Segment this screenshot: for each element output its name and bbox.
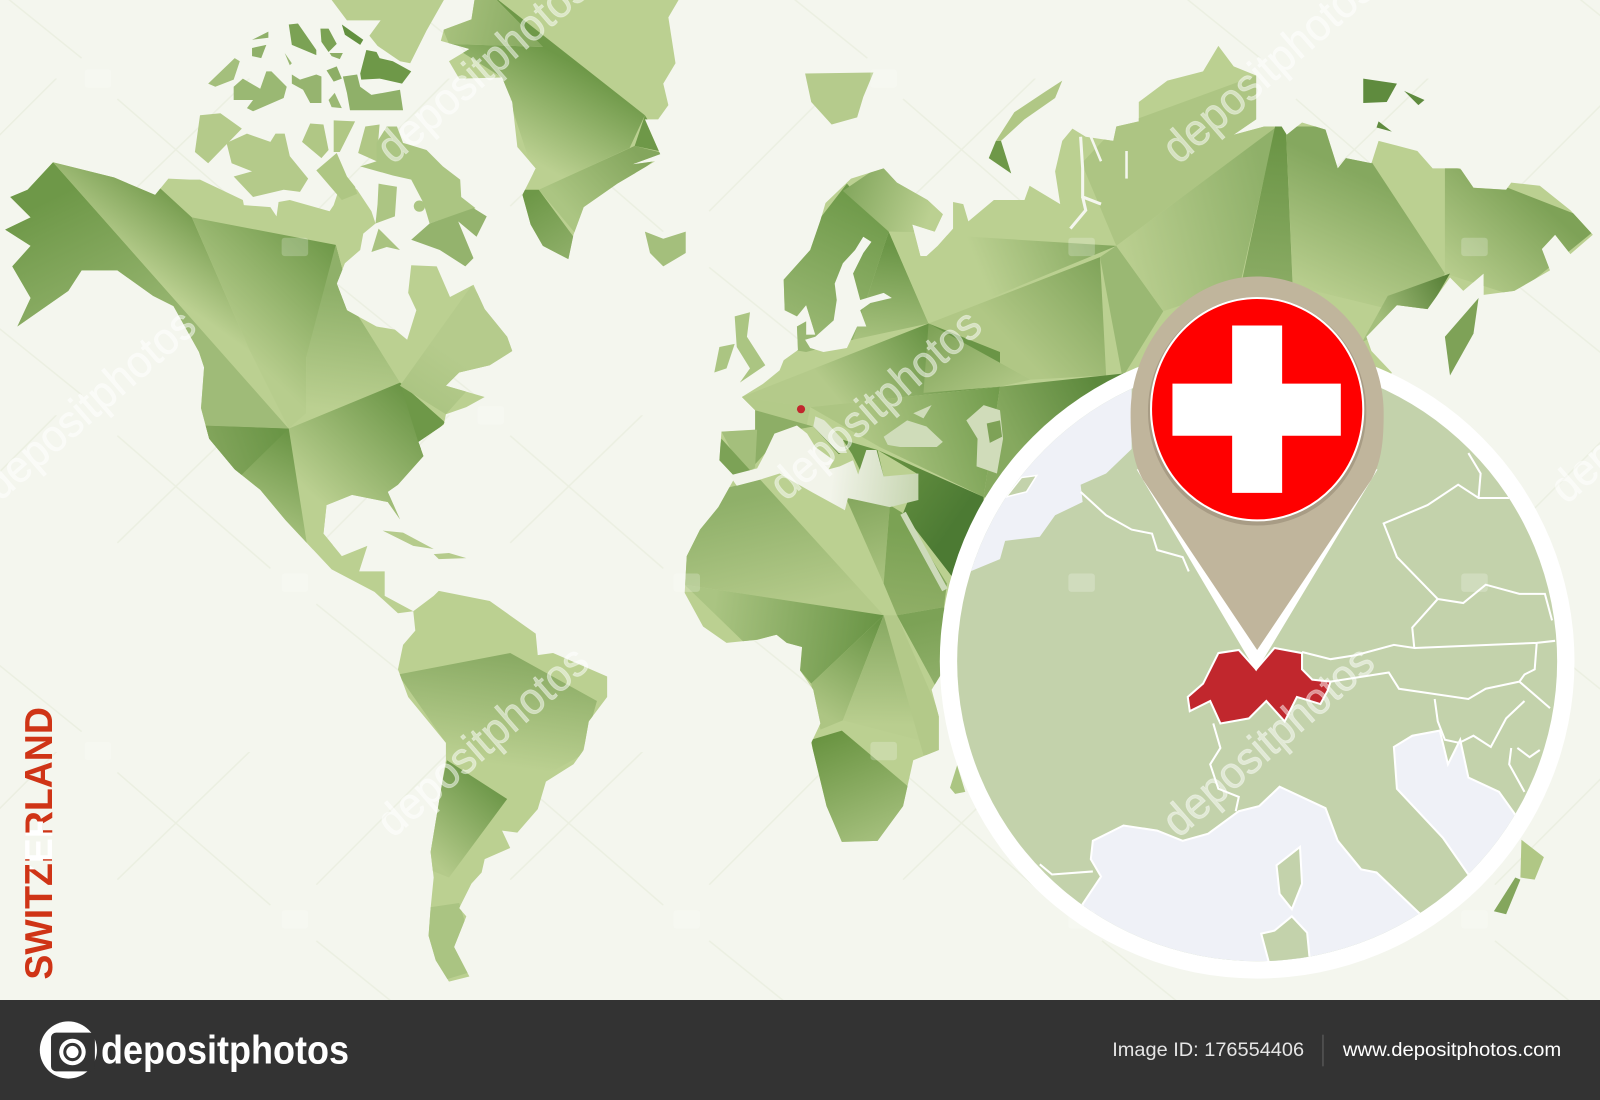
- Arctic Eurasian and Pacific islands: [805, 72, 1544, 914]
- Atlantic islands: [383, 232, 765, 559]
- watermark text: [0, 0, 1600, 846]
- arctic Canadian islands: [195, 0, 487, 266]
- logo wordmark: depositphotos: [101, 1028, 349, 1072]
- map pin with Swiss flag: [1131, 277, 1384, 671]
- image id: Image ID: 176554406: [1112, 1039, 1304, 1061]
- flag disc: [1151, 298, 1363, 520]
- watermark camera icons: [85, 69, 1488, 929]
- Africa facets: [685, 480, 858, 602]
- footer bar: [0, 1000, 1600, 1100]
- website: www.depositphotos.com: [1342, 1039, 1561, 1061]
- watermark text: depositphotos: [366, 635, 598, 846]
- vertical title: SWITZERLAND: [18, 707, 61, 980]
- Europe and Asia facets: [776, 184, 889, 352]
- flag cross: [1172, 326, 1341, 493]
- inland seas: [730, 137, 1127, 590]
- vertical title: [25, 708, 52, 978]
- marker: Switzerland on world map: [797, 405, 805, 413]
- watermark text: depositphotos: [759, 298, 991, 510]
- Switzerland highlighted: [1188, 648, 1331, 723]
- magnifier circle: Europe close-up: [940, 344, 1574, 980]
- vertical title: SWITZERLAND: [18, 707, 61, 980]
- watermark text: depositphotos: [1152, 635, 1384, 846]
- logo: camera badge: [40, 1021, 97, 1079]
